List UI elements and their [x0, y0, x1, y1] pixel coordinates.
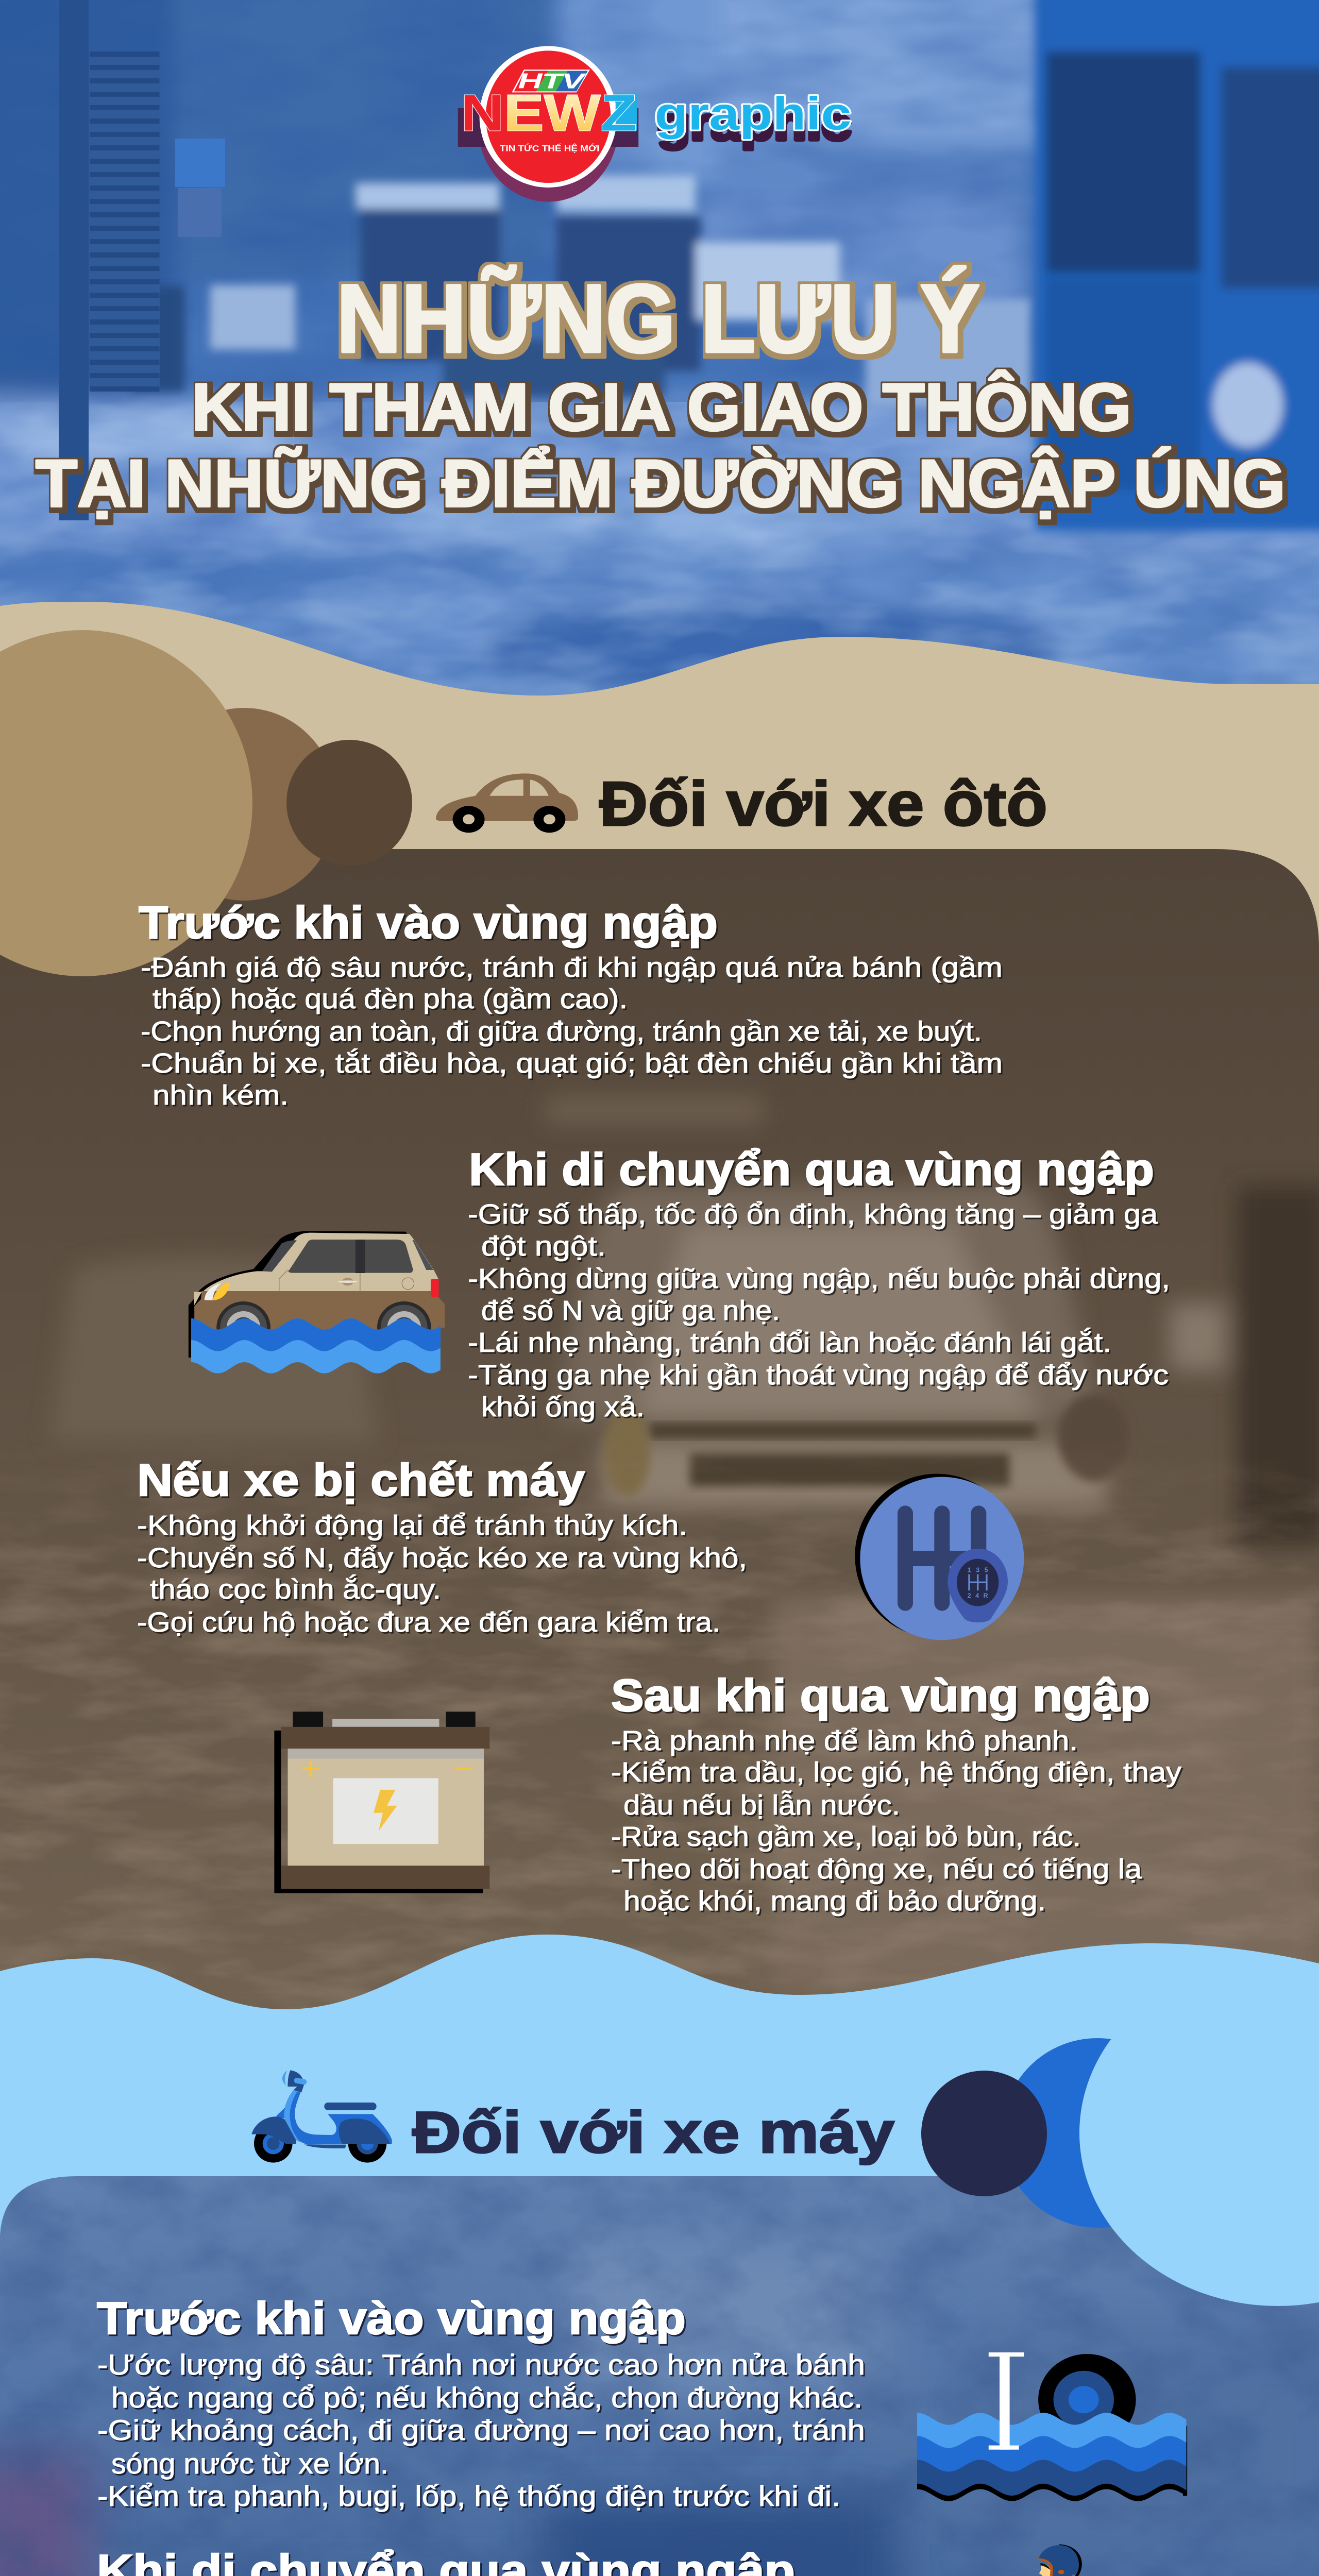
- text block: car, after flood: -Rửa sạch gầm xe, loại bỏ bùn, rác.: [611, 1821, 1081, 1852]
- text block: car, moving through flood: -Lái nhẹ nhàng, tránh đổi làn hoặc đánh lái gắt.: [468, 1327, 1111, 1358]
- text block: car, before entering flood: thấp) hoặc quá đèn pha (gầm cao).: [153, 984, 628, 1014]
- panel: light blue wave background: [0, 1935, 1319, 2421]
- panel: motorbike section flooded street photo: [0, 2176, 1319, 2576]
- text block: car, after flood: [611, 1670, 1181, 1917]
- text block: car, moving through flood: -Không dừng giữa vùng ngập, nếu buộc phải dừng,: [468, 1263, 1170, 1294]
- icon: car battery: [274, 1711, 489, 1893]
- text block: car, before entering flood: -Chuẩn bị xe, tắt điều hòa, quạt gió; bật đèn chiếu gần khi tầm: [141, 1048, 1003, 1079]
- icon: small car: [436, 773, 578, 833]
- title: NHỮNG LƯU Ý: [336, 264, 980, 372]
- icon: gear shift: 2 4 R: [968, 1592, 988, 1599]
- text block: car, before entering flood: -Đánh giá độ sâu nước, tránh đi khi ngập quá nửa bánh (gầm: [141, 952, 1003, 983]
- text block: car, moving through flood: khỏi ống xả.: [481, 1392, 645, 1422]
- text block: car, after flood: dầu nếu bị lẫn nước.: [623, 1790, 900, 1821]
- text block: car, engine stalled: tháo cọc bình ắc-quy.: [150, 1574, 441, 1605]
- text block: car, engine stalled: Nếu xe bị chết máy: [137, 1454, 585, 1505]
- text block: car, after flood: -Rà phanh nhẹ để làm khô phanh.: [611, 1725, 1078, 1756]
- text block: motorbike, before entering flood: [97, 2293, 865, 2512]
- text block: motorbike, before entering flood: hoặc ngang cổ pô; nếu không chắc, chọn đường khác.: [111, 2381, 863, 2414]
- text block: car, moving through flood: [468, 1144, 1170, 1422]
- text block: motorbike, before entering flood: Trước khi vào vùng ngập: [97, 2293, 686, 2344]
- panel: beige wave background: [0, 602, 1319, 2035]
- text block: car, after flood: -Kiểm tra dầu, lọc gió, hệ thống điện, thay: [611, 1757, 1181, 1788]
- text block: motorbike, before entering flood: -Giữ khoảng cách, đi giữa đường – nơi cao hơn, tránh: [97, 2414, 865, 2446]
- text block: car, moving through flood: -Giữ số thấp, tốc độ ổn định, không tăng – giảm ga: [468, 1199, 1158, 1230]
- icon: small scooter: [251, 2070, 392, 2163]
- text block: car, after flood: -Theo dõi hoạt động xe, nếu có tiếng lạ: [611, 1854, 1142, 1885]
- panel: car section flooded road photo: [0, 849, 1319, 2035]
- heading: motorbike section: Đối với xe máy: [412, 2100, 894, 2165]
- logo: HTV Newz graphic: [458, 46, 638, 202]
- logo word: graphic: [655, 88, 851, 150]
- logo word: graphic: graphic: [657, 98, 851, 150]
- text block: car, before entering flood: -Chọn hướng an toàn, đi giữa đường, tránh gần xe tải, xe buýt.: [141, 1016, 982, 1047]
- decorative circles: car section: [0, 630, 412, 976]
- heading: car section: Đối với xe ôtô: [599, 769, 1047, 839]
- panel: header flood street photo: [0, 0, 1319, 732]
- text block: car, before entering flood: Trước khi vào vùng ngập: [139, 897, 718, 948]
- icon: gear shift: [855, 1474, 1024, 1640]
- logo: HTV Newz graphic: HTV: [518, 69, 587, 93]
- logo: HTV Newz graphic: NEWZ: [461, 84, 637, 142]
- logo word: graphic: graphic: [655, 88, 851, 140]
- title: [36, 264, 1286, 521]
- text block: motorbike, before entering flood: -Ước lượng độ sâu: Tránh nơi nước cao hơn nửa bánh: [97, 2348, 865, 2381]
- title: TẠI NHỮNG ĐIỂM ĐƯỜNG NGẬP ÚNG: [36, 446, 1286, 521]
- text block: car, engine stalled: [137, 1454, 747, 1638]
- text block: car, engine stalled: -Không khởi động lại để tránh thủy kích.: [137, 1510, 687, 1541]
- text block: car, moving through flood: Khi di chuyển qua vùng ngập: [469, 1144, 1154, 1195]
- text block: car, moving through flood: đột ngột.: [481, 1231, 606, 1262]
- text block: car, after flood: hoặc khói, mang đi bảo dưỡng.: [623, 1886, 1046, 1917]
- text block: car, engine stalled: -Gọi cứu hộ hoặc đưa xe đến gara kiểm tra.: [137, 1607, 720, 1638]
- icon: car in water: [189, 1231, 458, 1374]
- decorative circles: motorbike section: [921, 1960, 1319, 2306]
- text block: car, moving through flood: -Tăng ga nhẹ khi gần thoát vùng ngập để đẩy nước: [468, 1360, 1169, 1391]
- text block: car, before entering flood: nhìn kém.: [153, 1080, 289, 1111]
- text block: car, before entering flood: [139, 897, 1003, 1111]
- text block: motorbike, before entering flood: sóng nước từ xe lớn.: [111, 2447, 388, 2480]
- icon: water depth at wheel: [917, 2352, 1232, 2501]
- text block: motorbike, before entering flood: -Kiểm tra phanh, bugi, lốp, hệ thống điện trước khi đi.: [97, 2480, 840, 2512]
- text block: car, after flood: Sau khi qua vùng ngập: [611, 1670, 1150, 1721]
- text block: car, engine stalled: -Chuyển số N, đẩy hoặc kéo xe ra vùng khô,: [137, 1543, 747, 1573]
- logo: HTV Newz graphic: TIN TỨC THẾ HỆ MỚI: [500, 143, 599, 153]
- icon: gear shift: 1 3 5: [968, 1567, 988, 1574]
- text block: car, moving through flood: để số N và giữ ga nhẹ.: [481, 1295, 780, 1326]
- title: KHI THAM GIA GIAO THÔNG: [192, 369, 1131, 445]
- icon: rider on scooter in water: [883, 2544, 1233, 2576]
